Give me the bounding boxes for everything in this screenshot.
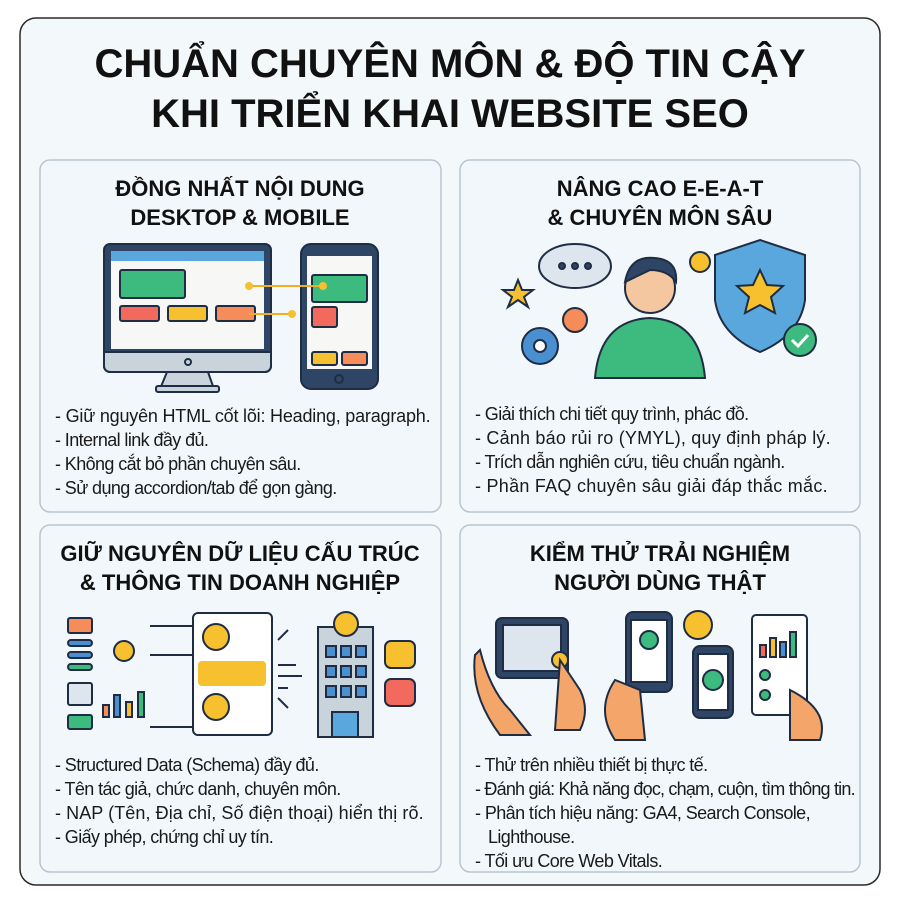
bullets: E-E-A-T: - Giải thích chi tiết quy trình, phác đồ.	[475, 404, 749, 424]
heading: structured data	[60, 541, 420, 595]
panel: structured data	[40, 525, 441, 872]
heading: desktop & mobile	[115, 176, 365, 230]
panel: user testing	[460, 525, 860, 872]
title: CHUẨN CHUYÊN MÔN & ĐỘ TIN CẬY	[94, 39, 806, 86]
heading: user testing: NGƯỜI DÙNG THẬT	[554, 570, 766, 595]
bullets: E-E-A-T: - Phần FAQ chuyên sâu giải đáp thắc mắc.	[475, 475, 827, 496]
heading: E-E-A-T	[548, 176, 772, 230]
bullets: E-E-A-T	[475, 404, 830, 496]
heading: structured data: GIỮ NGUYÊN DỮ LIỆU CẤU TRÚC	[60, 541, 420, 566]
panel: E-E-A-T	[460, 160, 860, 512]
bullets: desktop & mobile: - Internal link đầy đủ.	[55, 430, 208, 450]
heading: E-E-A-T: & CHUYÊN MÔN SÂU	[548, 205, 772, 230]
illustration: devices in hands	[474, 611, 822, 740]
bullets: structured data: - Giấy phép, chứng chỉ uy tín.	[55, 827, 273, 847]
bullets: structured data: - Tên tác giả, chức danh, chuyên môn.	[55, 779, 341, 799]
heading: user testing	[530, 541, 790, 595]
heading: E-E-A-T: NÂNG CAO E-E-A-T	[557, 176, 764, 201]
bullets: E-E-A-T: - Cảnh báo rủi ro (YMYL), quy định pháp lý.	[475, 428, 830, 448]
bullets: user testing: - Thử trên nhiều thiết bị thực tế.	[475, 755, 708, 775]
bullets: desktop & mobile: - Giữ nguyên HTML cốt lõi: Heading, paragraph.	[55, 406, 430, 426]
bullets: structured data: - NAP (Tên, Địa chỉ, Số điện thoại) hiển thị rõ.	[55, 803, 423, 823]
bullets: structured data: - Structured Data (Schema) đầy đủ.	[55, 755, 319, 775]
bullets: user testing: - Tối ưu Core Web Vitals.	[475, 851, 662, 871]
bullets: E-E-A-T: - Trích dẫn nghiên cứu, tiêu chuẩn ngành.	[475, 451, 785, 472]
title	[94, 39, 806, 136]
panel: desktop & mobile	[40, 160, 441, 512]
heading: structured data: & THÔNG TIN DOANH NGHIỆP	[80, 570, 400, 595]
bullets: user testing: Lighthouse.	[488, 827, 574, 847]
heading: user testing: KIỂM THỬ TRẢI NGHIỆM	[530, 541, 790, 566]
illustration: person thinking, gears, shield	[503, 240, 816, 378]
illustration: monitor and phone	[104, 244, 378, 392]
title: KHI TRIỂN KHAI WEBSITE SEO	[151, 89, 749, 136]
bullets: user testing	[475, 755, 855, 871]
bullets: user testing: - Phân tích hiệu năng: GA4, Search Console,	[475, 803, 810, 823]
bullets: desktop & mobile: - Không cắt bỏ phần chuyên sâu.	[55, 453, 301, 474]
illustration: data to business	[68, 612, 415, 737]
bullets: desktop & mobile: - Sử dụng accordion/tab để gọn gàng.	[55, 478, 337, 498]
bullets: user testing: - Đánh giá: Khả năng đọc, chạm, cuộn, tìm thông tin.	[475, 779, 855, 799]
heading: desktop & mobile: ĐỒNG NHẤT NỘI DUNG	[115, 176, 365, 201]
heading: desktop & mobile: DESKTOP & MOBILE	[130, 205, 350, 230]
bullets: desktop & mobile	[55, 406, 430, 498]
bullets: structured data	[55, 755, 423, 847]
